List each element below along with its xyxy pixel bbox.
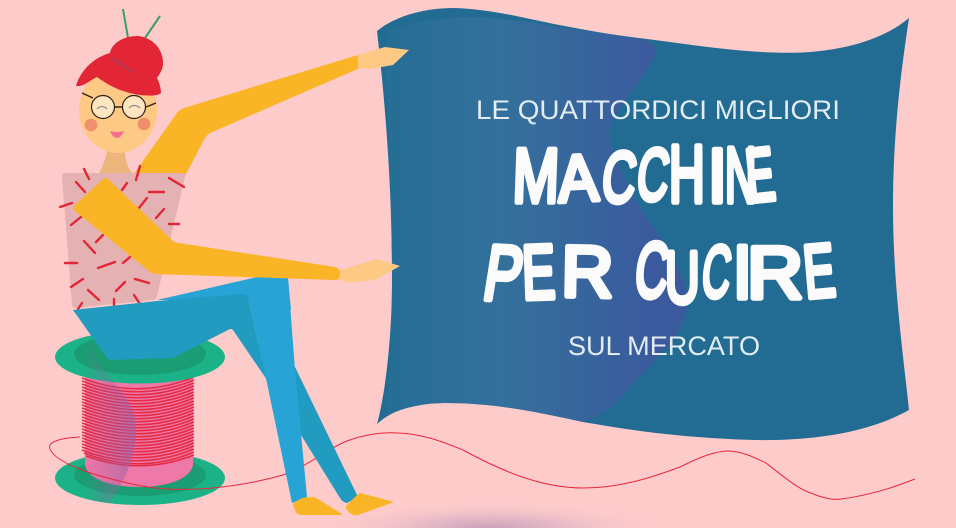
thread spool	[55, 330, 225, 505]
cheeks	[85, 119, 97, 131]
title: PER CUCIRE: P	[478, 231, 529, 318]
title: PER CUCIRE	[478, 226, 838, 320]
title: MACCHINE: I	[708, 134, 727, 219]
title: MACCHINE: A	[556, 141, 600, 217]
title: PER CUCIRE: E	[800, 229, 838, 315]
spool shading	[75, 345, 136, 503]
neck	[99, 150, 135, 176]
shirt dashes	[60, 166, 184, 309]
title: MACCHINE: C	[633, 133, 673, 216]
banner flag	[377, 8, 909, 440]
mouth	[110, 131, 124, 138]
face	[79, 67, 157, 153]
wound thread	[82, 377, 194, 466]
title: PER CUCIRE: I	[733, 231, 752, 315]
red thread line	[50, 433, 915, 499]
title: PER CUCIRE: R	[561, 232, 614, 313]
spool bottom disc	[55, 451, 225, 505]
title: PER CUCIRE: R	[747, 232, 803, 314]
spool body	[85, 370, 193, 487]
title: PER CUCIRE: E	[521, 229, 557, 316]
title: MACCHINE: M	[511, 133, 561, 219]
title: MACCHINE	[511, 130, 779, 220]
hair pins	[123, 9, 160, 38]
shirt	[62, 173, 185, 308]
lower arm	[73, 178, 340, 280]
heading line 3: SUL MERCATO	[568, 331, 760, 361]
lower hand	[340, 259, 400, 283]
floor shadow	[315, 501, 665, 528]
title: MACCHINE: H	[669, 130, 705, 220]
title: PER CUCIRE: C	[698, 231, 735, 313]
right shoe	[346, 494, 394, 515]
title: PER CUCIRE: U	[665, 238, 700, 320]
title: MACCHINE: E	[742, 132, 779, 218]
spool top disc	[55, 330, 225, 384]
hair	[76, 36, 163, 96]
back lower leg	[248, 278, 307, 503]
upper arm behind shirt	[133, 55, 360, 176]
title: PER CUCIRE: C	[631, 226, 673, 314]
title: MACCHINE: N	[725, 133, 756, 219]
back thigh	[157, 277, 291, 310]
heading line 1: LE QUATTORDICI MIGLIORI	[476, 95, 840, 125]
title: MACCHINE: C	[598, 137, 640, 217]
banner fold	[385, 17, 688, 422]
upper hand	[358, 47, 409, 69]
front leg	[73, 294, 358, 503]
glasses	[82, 93, 156, 118]
hair shadow	[112, 58, 133, 72]
woman figure	[60, 9, 409, 515]
left shoe	[293, 497, 342, 515]
